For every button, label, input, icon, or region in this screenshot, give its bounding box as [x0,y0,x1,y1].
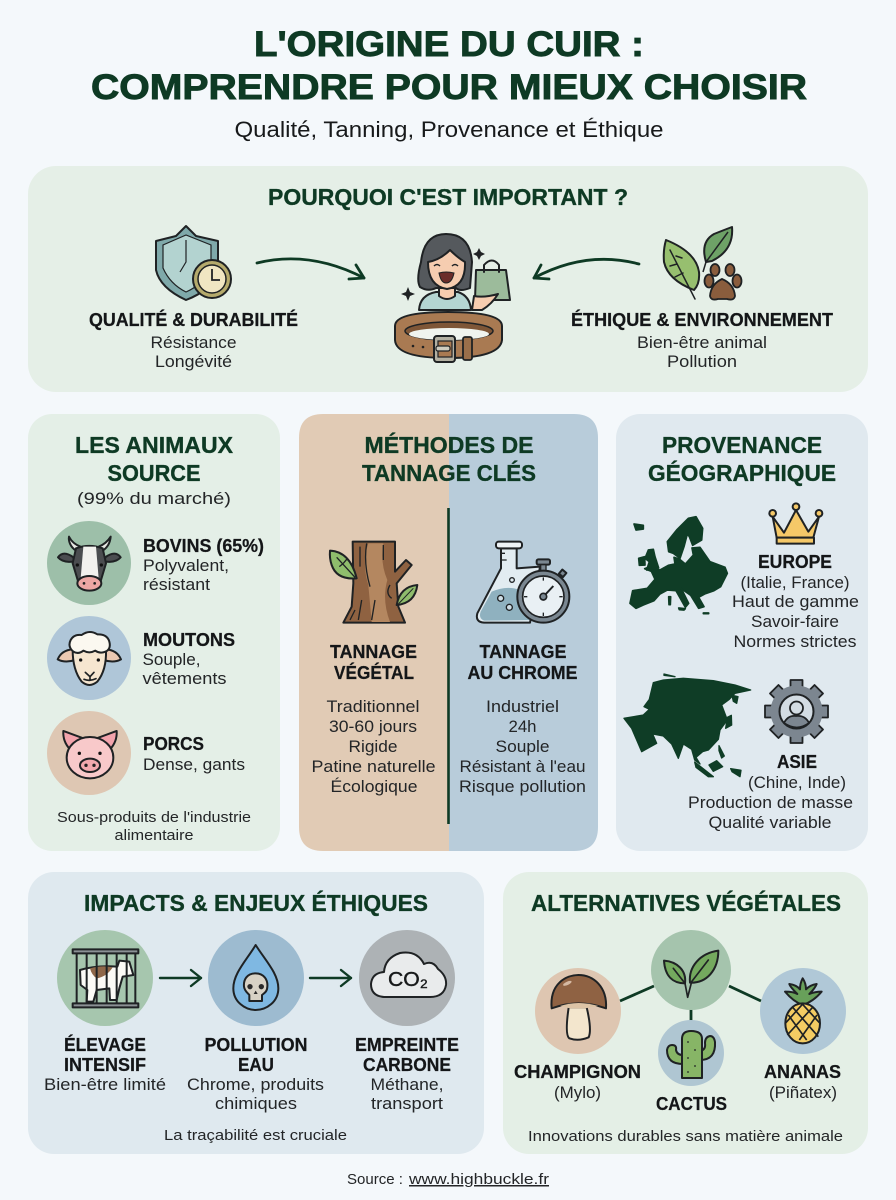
icon: CO2 cloud: CO₂ [388,969,428,991]
text: asie: (Chine, Inde) [748,774,846,792]
text: bovins: résistant [143,576,210,594]
panel: les animaux source [28,414,280,851]
text: tannage végétal: Rigide [348,738,398,756]
heading: les animaux source: LES ANIMAUX [75,432,234,458]
text: tannage végétal: TANNAGE [330,642,417,662]
icon: leaves and paw [664,227,742,300]
text: tannage végétal: 30-60 jours [329,718,417,736]
icon: cactus [658,1020,724,1086]
heading: les animaux source: SOURCE [108,460,200,486]
text: moutons: Souple, [142,651,200,669]
heading: impacts: IMPACTS & ENJEUX ÉTHIQUES [84,889,428,916]
arrow: right to center [534,259,639,279]
text: pollution eau: Chrome, produits [187,1076,324,1094]
text: pollution eau [187,1035,324,1113]
text: pollution eau: POLLUTION [204,1035,308,1055]
title: L'ORIGINE DU CUIR : [254,25,644,64]
text: qualité et durabilité: Longévité [155,353,232,371]
note: sous-produits [57,809,251,844]
text: tannage au chrome: Industriel [486,698,559,716]
text: qualité et durabilité: Résistance [150,334,236,352]
arrow: pollution to carbone [310,970,351,986]
text: champignon [514,1062,641,1102]
text: tannage au chrome: Risque pollution [459,778,586,796]
icon: tree stump with leaves [330,542,417,623]
heading: méthodes de tannage: MÉTHODES DE [364,431,534,458]
subtitle: Qualité, Tanning, Provenance et Éthique [234,117,664,142]
icon: leather belt [395,312,502,362]
text: cactus: CACTUS [656,1094,727,1114]
icon: flask and stopwatch [477,542,569,623]
text: bovins [143,536,264,594]
text: éthique et environnement [571,309,833,371]
text: champignon: CHAMPIGNON [514,1062,641,1082]
text: ananas [764,1062,841,1102]
text: moutons: MOUTONS [143,630,235,650]
text: élevage intensif: Bien-être limité [44,1076,166,1094]
icon: pig [47,711,131,795]
text: empreinte carbone: CARBONE [363,1055,451,1075]
text: champignon: (Mylo) [554,1084,601,1102]
icon: sheep [47,616,131,700]
footer source: Source : [347,1171,403,1188]
text: europe: Savoir-faire [751,613,839,631]
text: porcs [143,734,245,774]
panel: pourquoi c'est important [28,166,868,392]
text: moutons: vêtements [142,670,226,688]
title [91,25,807,107]
text: tannage végétal [312,642,436,796]
text: asie: Qualité variable [708,814,832,832]
arrow: left to center [257,259,364,279]
text: empreinte carbone: Méthane, [370,1076,444,1094]
panel: alternatives végétales [503,872,868,1154]
note: traçabilité: La traçabilité est cruciale [164,1127,347,1144]
text: porcs: Dense, gants [143,756,245,774]
text: tannage au chrome: Souple [496,738,550,756]
title: COMPRENDRE POUR MIEUX CHOISIR [91,68,807,107]
icon: central leaves [651,930,731,1010]
text: qualité et durabilité [89,309,298,371]
heading: provenance géographique: PROVENANCE [662,432,822,458]
icon: caged cow [57,930,153,1026]
text: élevage intensif: ÉLEVAGE [64,1034,146,1055]
text: tannage végétal: VÉGÉTAL [334,662,414,683]
text: pollution eau: EAU [238,1055,274,1075]
text: bovins: BOVINS (65%) [143,536,264,556]
text: empreinte carbone [355,1035,459,1113]
text: tannage végétal: Traditionnel [326,698,420,716]
icon: gear with person [765,680,828,743]
note: innovations: Innovations durables sans matière animale [528,1128,843,1145]
note: sous-produits: alimentaire [114,827,194,844]
text: élevage intensif: INTENSIF [64,1055,146,1075]
text: porcs: PORCS [143,734,204,754]
text: tannage au chrome [459,642,586,796]
text: moutons [142,630,235,688]
icon: mushroom [535,968,621,1054]
heading: méthodes de tannage: TANNAGE CLÉS [362,459,536,486]
divider [447,508,450,824]
icon: happy customer with bag [401,234,510,310]
text: europe: (Italie, France) [740,574,850,592]
text: éthique et environnement: Pollution [667,353,737,371]
text: qualité et durabilité: QUALITÉ & DURABILITÉ [89,309,298,330]
icon: crown [769,503,822,544]
text: asie: Production de masse [688,794,853,812]
text: tannage au chrome: 24h [508,718,536,736]
map: europe [630,517,727,614]
heading: provenance géographique [648,432,836,486]
text: asie: ASIE [777,752,817,772]
heading: les animaux source [75,432,234,508]
icon: CO2 cloud [359,930,455,1026]
icon: pineapple [760,968,846,1054]
text: asie [688,752,853,832]
text: europe: EUROPE [758,552,832,572]
text: tannage au chrome: Résistant à l'eau [460,758,586,776]
heading: alternatives: ALTERNATIVES VÉGÉTALES [531,889,841,916]
footer source [347,1171,549,1188]
footer source: www.highbuckle.fr [408,1171,549,1188]
heading: méthodes de tannage [362,431,536,486]
text: tannage au chrome: AU CHROME [468,663,578,683]
text: tannage au chrome: TANNAGE [480,642,566,662]
icon: polluted water drop [208,930,304,1026]
note: sous-produits: Sous-produits de l'industrie [57,809,251,826]
connector lines [620,986,761,1021]
text: europe: Normes strictes [734,633,856,651]
heading: les animaux source: (99% du marché) [77,490,231,508]
text: ananas: (Piñatex) [769,1084,837,1102]
text: europe: Haut de gamme [732,593,859,611]
panel: provenance géographique [616,414,868,851]
heading: provenance géographique: GÉOGRAPHIQUE [648,459,836,486]
text: pollution eau: chimiques [215,1095,297,1113]
arrow: élevage to pollution [160,970,201,986]
text: tannage végétal: Écologique [330,777,418,796]
text: tannage végétal: Patine naturelle [312,758,436,776]
icon: cow [47,521,131,605]
icon: shield and clock [156,226,231,300]
text: europe [732,552,859,651]
panel: impacts et enjeux éthiques [28,872,484,1154]
text: éthique et environnement: ÉTHIQUE & ENVIRONNEMENT [571,309,833,330]
text: empreinte carbone: EMPREINTE [355,1035,459,1055]
heading: pourquoi: POURQUOI C'EST IMPORTANT ? [268,184,628,210]
text: ananas: ANANAS [764,1062,841,1082]
text: bovins: Polyvalent, [143,557,229,575]
text: éthique et environnement: Bien-être animal [637,334,767,352]
map: asia [624,674,751,777]
panel: méthodes de tannage [299,414,598,851]
text: empreinte carbone: transport [371,1095,443,1113]
text: élevage intensif [44,1034,166,1094]
